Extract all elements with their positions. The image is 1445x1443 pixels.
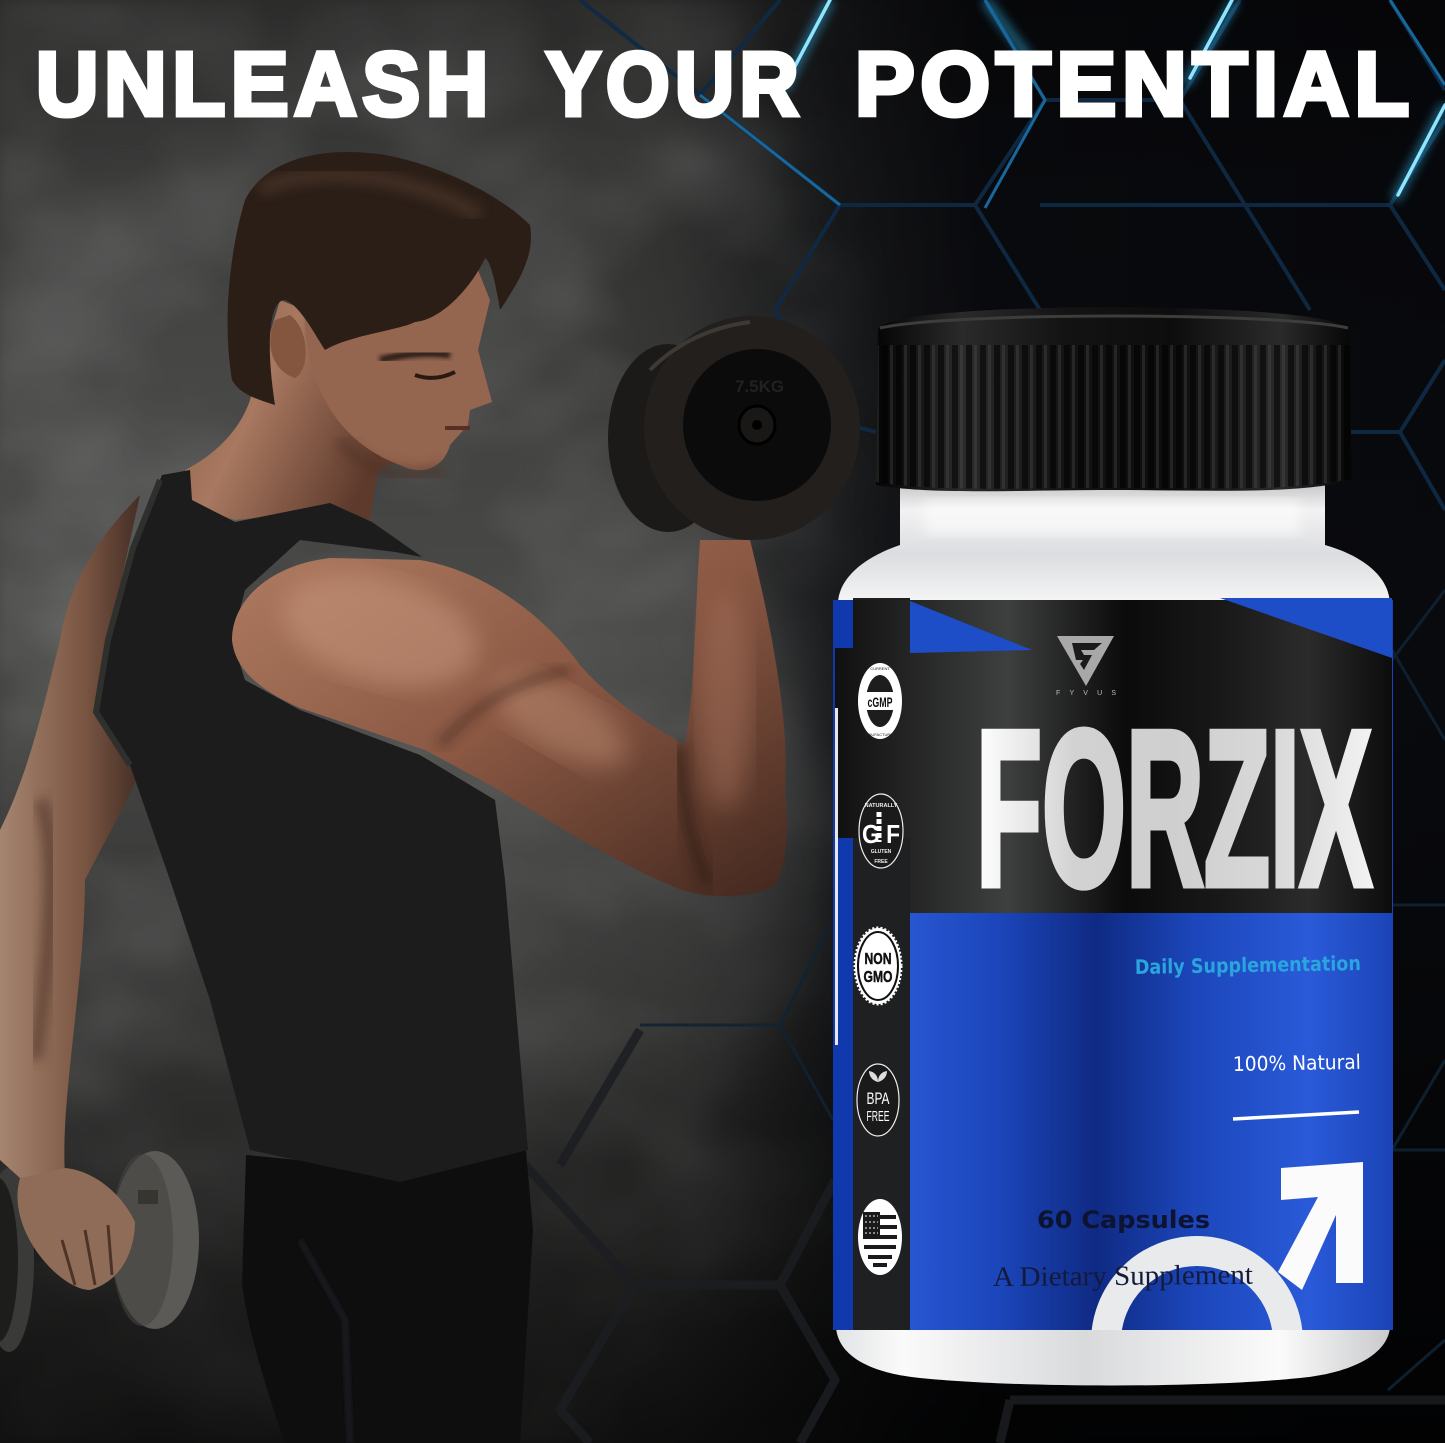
head [304,230,492,470]
upper dumbbell [608,316,860,540]
brand logo: FYVUS [1056,690,1116,697]
brand logo [1056,636,1116,697]
hexagon grid with neon lines [525,0,1445,1443]
text: capsule count: 60 Capsules [1037,1206,1210,1234]
badge: non GMO: GMO [864,969,892,986]
divider rule on label [1233,1112,1359,1119]
top black band [835,600,1392,913]
product bottle [833,307,1393,1433]
badge: gluten free [859,794,903,868]
badge: USA flag [858,1199,902,1275]
title: POTENTIAL [855,35,1415,135]
text: daily supplementation: Daily Supplementation [1135,951,1361,979]
badge: BPA free: BPA [866,1089,890,1108]
badge: gluten free: FREE [874,859,888,865]
man lifting dumbbells [0,152,860,1443]
male symbol [1092,1162,1363,1330]
bottle base [836,1300,1390,1386]
badge: non GMO: NON [864,951,892,968]
tank top [95,470,528,1182]
badge: gluten free: NATURALLY [865,803,898,809]
hair [228,152,531,405]
badge: BPA free: FREE [866,1108,890,1125]
bottle cap [876,307,1352,491]
badge: non GMO [855,928,901,1004]
title: YOUR [546,35,804,135]
badge: cGMP [858,663,902,739]
badge: gluten free: G F [862,819,900,849]
bottle neck [838,478,1390,605]
badge: gluten free: GLUTEN [871,849,892,855]
lower dumbbell [0,1151,199,1352]
flexed arm [232,540,787,896]
title [36,35,1415,135]
rear arm [0,495,150,1178]
badge: BPA free [857,1064,899,1136]
blue corner triangles [910,598,1392,658]
title: UNLEASH [36,35,494,135]
label [833,598,1393,1330]
neck and shoulder skin [185,300,400,520]
badge: cGMP: CURRENT [870,666,890,671]
badge: cGMP: MANUFACTURING [863,732,897,737]
upper dumbbell: 7.5KG [735,377,784,396]
text: dietary supplement: A Dietary Supplement [993,1260,1253,1293]
shorts [242,1140,533,1443]
text: 100% natural: 100% Natural [1233,1050,1361,1076]
badge: cGMP: cGMP [868,694,892,710]
